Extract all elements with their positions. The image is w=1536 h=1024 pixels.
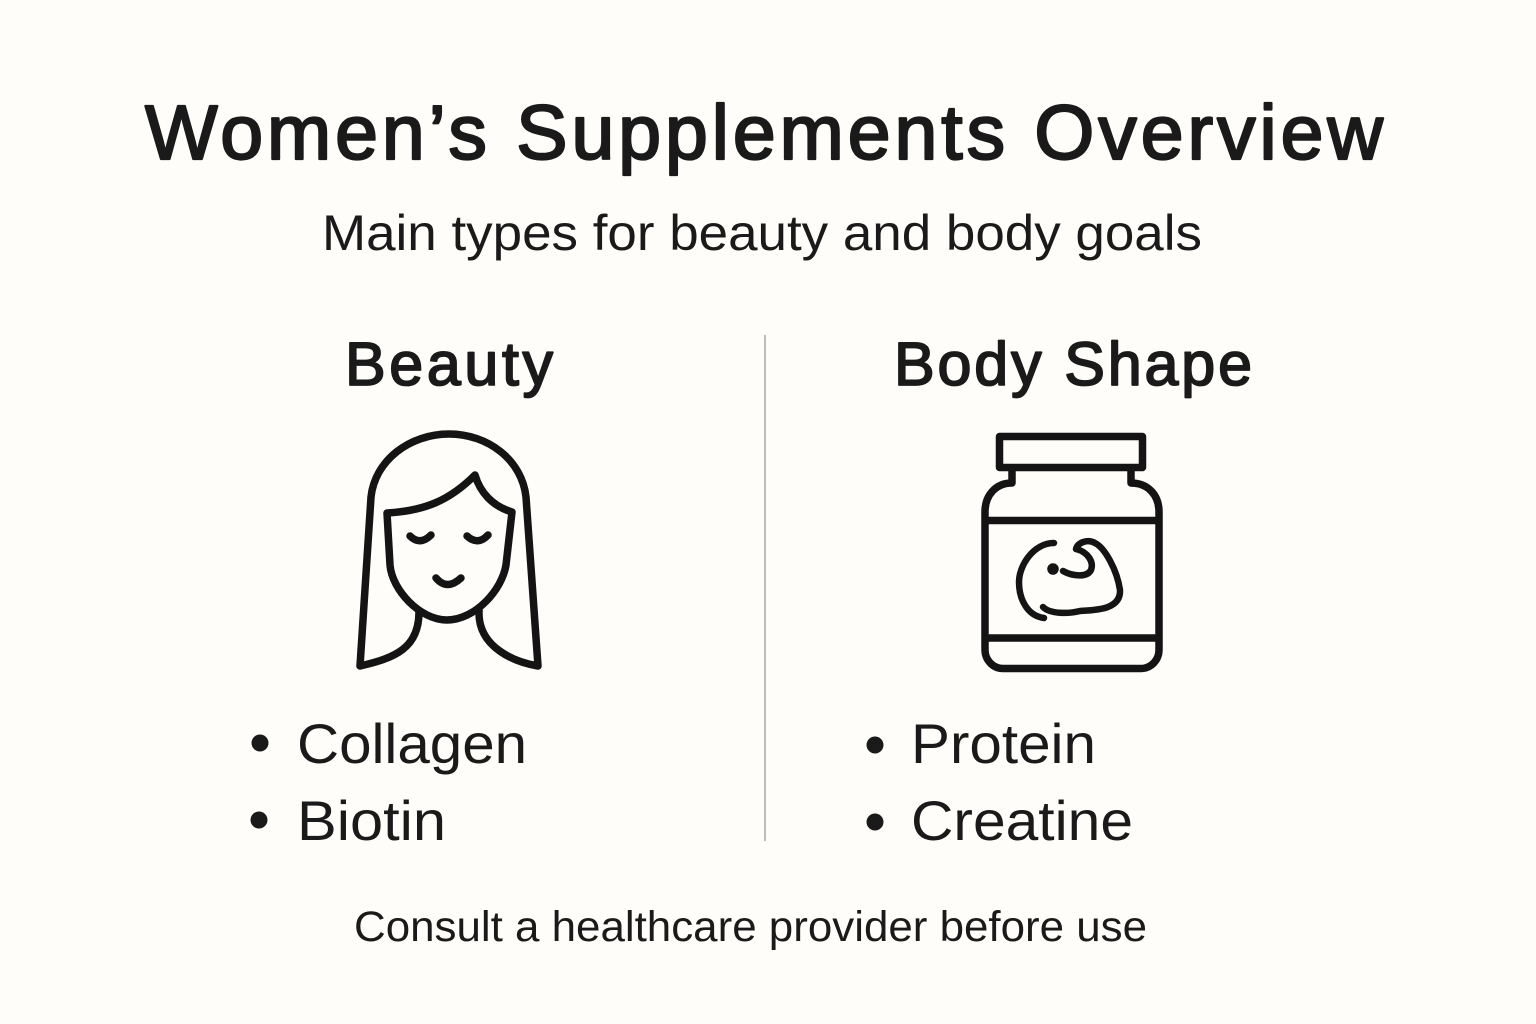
panel: body shape xyxy=(866,330,1252,852)
footer note: Consult a healthcare provider before use xyxy=(354,903,1147,951)
heading: beauty: Beauty xyxy=(345,330,554,398)
title: Women’s Supplements Overview xyxy=(145,90,1383,176)
list: body shape supplements: Protein xyxy=(911,712,1096,775)
divider xyxy=(764,335,766,841)
list: beauty supplements xyxy=(250,712,527,852)
list: body shape supplements xyxy=(866,712,1133,852)
list: beauty supplements: Collagen xyxy=(297,712,527,775)
icon: woman's face xyxy=(360,434,538,666)
icon: flexed arm xyxy=(1019,541,1120,618)
icon: supplement jar xyxy=(985,436,1159,668)
panel: beauty xyxy=(250,330,554,852)
list: body shape supplements: Creatine xyxy=(911,789,1133,852)
heading: body shape: Body Shape xyxy=(894,330,1252,398)
list: beauty supplements: Biotin xyxy=(297,789,446,852)
subtitle: Main types for beauty and body goals xyxy=(322,205,1202,261)
